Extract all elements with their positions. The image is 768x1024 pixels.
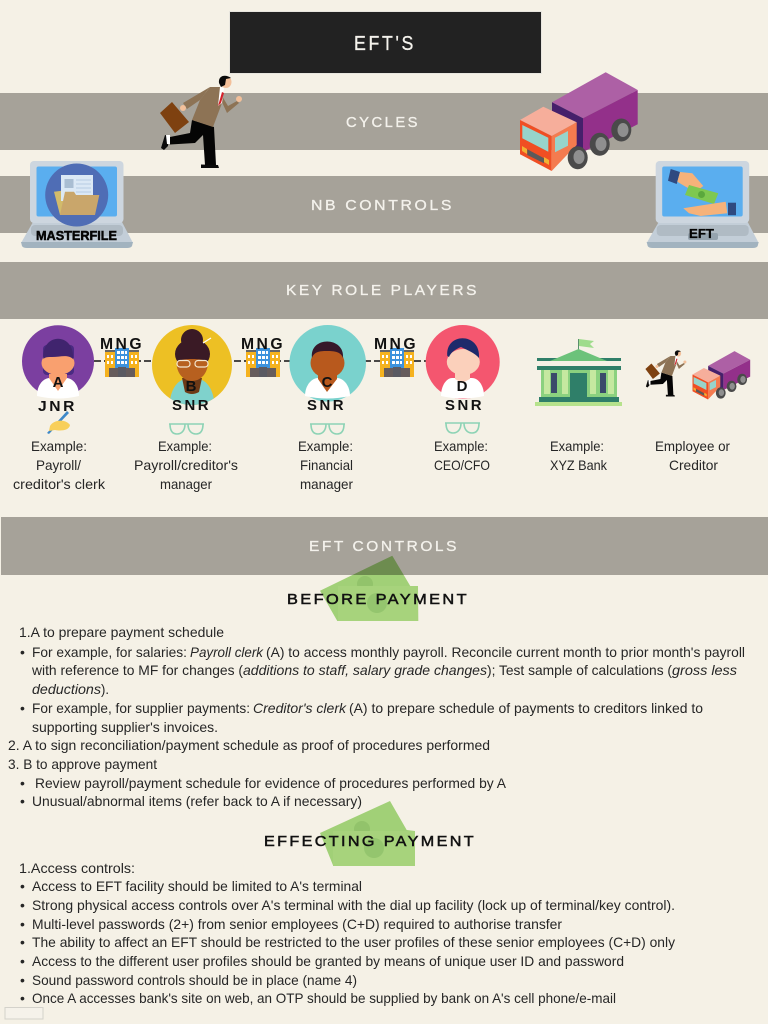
role example: B: Payroll/creditor's [134,457,238,473]
icon: small truck [692,351,750,399]
text block: before payment steps: Payroll clerk [190,644,264,660]
text block: before payment steps: ); Test sample of calculations ( [487,662,672,678]
text block: before payment steps: • [20,793,25,809]
label: SNR (C): SNR [307,397,346,414]
icon: EFT laptop: EFT [689,226,714,241]
text block: effecting payment controls: • [20,878,25,894]
icon: banknotes (before payment) [320,556,418,621]
icon: building 2 [246,348,280,377]
icon: small employee [645,350,686,396]
avatar: C senior: C [322,374,333,391]
icon: building 3 [380,348,414,377]
text block: before payment steps: 1.A to prepare payment schedule [19,624,224,640]
icon: EFT laptop [647,161,759,248]
text block: effecting payment controls: Once A accesses bank's site on web, an OTP should be supplied by bank on A's cell phone/e-mail [32,990,616,1006]
header band: key role players [0,262,768,319]
text block: before payment steps: supporting supplier's invoices. [32,719,218,735]
role example: employee or creditor [655,438,730,473]
title [230,12,542,74]
role example: bank: XYZ Bank [550,457,608,473]
icon: glasses (D) [445,423,480,433]
text block: before payment steps: Unusual/abnormal items (refer back to A if necessary) [32,793,362,809]
text block: before payment steps: deductions [32,681,101,697]
role example: D: Example: [434,438,488,454]
avatar: D senior: D [457,378,468,395]
text block: effecting payment controls: Access to EFT facility should be limited to A's terminal [32,878,362,894]
heading: cycles: CYCLES [346,114,420,131]
avatar: B senior: B [186,378,197,395]
role example: employee or creditor: Employee or [655,438,730,454]
role example: bank [550,438,608,473]
icon: banknotes (effecting payment) [320,801,415,866]
text block: effecting payment controls: • [20,972,25,988]
text block: before payment steps: 3. B to approve payment [8,756,157,772]
icon: building 1 [105,348,139,377]
text block: effecting payment controls: Access to the different user profiles should be granted by means of unique user ID and password [32,953,624,969]
role example: D [434,438,490,473]
connector line between roles [94,360,458,362]
icon: masterfile laptop [21,161,133,248]
heading: EFT controls: EFT CONTROLS [309,538,459,555]
header band: NB controls [0,176,768,233]
avatar: A junior: A [53,374,64,391]
text block: before payment steps: additions to staff, salary grade changes [243,662,487,678]
role example: C: manager [300,476,353,492]
role example: B [134,438,238,492]
avatar: B senior [152,325,232,408]
text block: effecting payment controls: • [20,953,25,969]
text block: before payment steps: For example, for supplier payments: [32,700,250,716]
text block: effecting payment controls: The ability to affect an EFT should be restricted to the user profiles of these senior employees (C+D) only [32,934,675,950]
text block: before payment steps: Creditor's clerk [253,700,347,716]
icon: writing hand [47,411,70,434]
role example: A: creditor's clerk [13,476,106,492]
text block: effecting payment controls: • [20,897,25,913]
label: MNG 3: MNG [374,336,418,353]
text block: before payment steps: gross less [672,662,737,678]
role example: C [298,438,353,492]
text block: effecting payment controls: 1.Access controls: [19,860,135,876]
text block: before payment steps: (A) to access monthly payroll. Reconcile current month to prior month's payroll [266,644,745,660]
text block: effecting payment controls: • [20,934,25,950]
role example: A [13,438,106,492]
icon: glasses (C) [310,424,345,434]
avatar: A junior [22,325,94,398]
label: MNG 2: MNG [241,336,285,353]
icon: delivery truck [520,72,638,171]
heading: effecting payment: EFFECTING PAYMENT [264,833,476,850]
text block: effecting payment controls: Multi-level passwords (2+) from senior employees (C+D) required to authorise transfer [32,916,562,932]
role example: C: Example: [298,438,353,454]
text block: before payment steps: (A) to prepare schedule of payments to creditors linked to [349,700,703,716]
text block: before payment steps: • [20,700,25,716]
role example: B: manager [160,476,212,492]
heading: NB controls: NB CONTROLS [311,197,454,214]
heading: key role players: KEY ROLE PLAYERS [286,282,479,299]
text block: effecting payment controls: • [20,990,25,1006]
text block: before payment steps: For example, for salaries: [32,644,187,660]
header band: EFT controls [1,517,768,575]
header band: cycles [0,93,768,150]
text block: before payment steps [8,624,745,809]
label: MNG 1: MNG [100,336,144,353]
small empty box [5,1008,43,1019]
icon: running employee [160,76,242,168]
role example: bank: Example: [550,438,604,454]
label: SNR (B): SNR [172,397,211,414]
text block: before payment steps: ). [101,681,109,697]
role example: A: Example: [31,438,87,454]
text block: effecting payment controls: Sound password controls should be in place (name 4) [32,972,357,988]
label: JNR: JNR [38,398,77,415]
icon: glasses (B) [169,424,204,434]
avatar: D senior [426,325,500,399]
text block: before payment steps: with reference to MF for changes ( [31,662,243,678]
text block: effecting payment controls: Strong physical access controls over A's terminal with the dial up facility (lock up of terminal/key control). [32,897,675,913]
text block: before payment steps: • [20,644,25,660]
role example: B: Example: [158,438,212,454]
text block: before payment steps: • [20,775,25,791]
label: SNR (D): SNR [445,397,484,414]
icon: masterfile laptop: MASTERFILE [36,228,117,243]
avatar: C senior [289,325,366,402]
role example: C: Financial [300,457,353,473]
role example: employee or creditor: Creditor [669,457,718,473]
heading: before payment: BEFORE PAYMENT [287,591,469,608]
role example: D: CEO/CFO [434,457,490,473]
role example: A: Payroll/ [36,457,81,473]
text block: effecting payment controls: • [20,916,25,932]
text block: before payment steps: 2. A to sign reconciliation/payment schedule as proof of procedures performed [8,737,490,753]
title: EFT'S [354,33,416,55]
text block: effecting payment controls [19,860,675,1006]
icon: bank [535,339,622,406]
text block: before payment steps: Review payroll/payment schedule for evidence of procedures performed by A [35,775,507,791]
